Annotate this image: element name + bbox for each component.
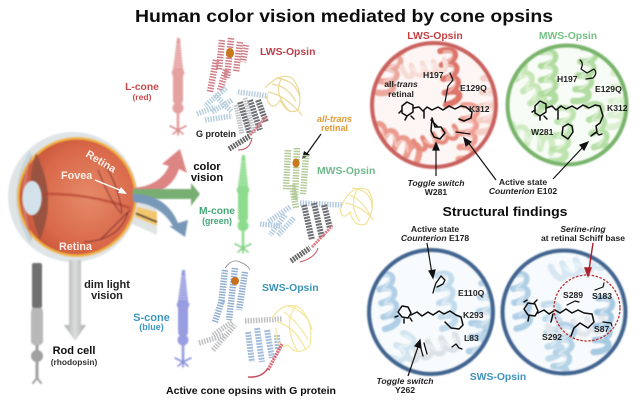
eye illustration bbox=[8, 132, 157, 262]
arrow: red to L-cone bbox=[133, 149, 187, 196]
arrow: MWS counterion bbox=[553, 142, 588, 179]
eyeball bbox=[8, 132, 138, 262]
panel: MWS-Opsin pocket bbox=[500, 40, 630, 170]
residue labels: LWS: retinal bbox=[388, 89, 414, 99]
residue labels: SWS right: S289 bbox=[563, 290, 583, 300]
L-cone label: (red) bbox=[132, 92, 152, 102]
residue labels: SWS left: E110Q bbox=[458, 288, 485, 298]
residue labels: SWS right bbox=[542, 290, 612, 342]
residue labels: MWS bbox=[531, 74, 628, 137]
callout: toggle switch Y262: Toggle switch bbox=[377, 376, 433, 386]
rod cell bbox=[31, 263, 43, 383]
residue labels: SWS left bbox=[458, 288, 485, 343]
arrow: dim light bbox=[64, 260, 86, 341]
callout: toggle switch W281: W281 bbox=[425, 187, 447, 197]
residue labels: MWS: H197 bbox=[557, 74, 578, 84]
label: SWS-Opsin: SWS-Opsin bbox=[262, 283, 319, 294]
ring: MWS bbox=[508, 46, 626, 164]
eye labels: Retina bbox=[83, 148, 119, 176]
panel: SWS-Opsin pocket right bbox=[500, 245, 630, 380]
lens bbox=[22, 181, 42, 215]
callout: counterion E102: Counterion E102 bbox=[489, 186, 557, 196]
residue labels: MWS: W281 bbox=[531, 127, 554, 137]
label: SWS-Opsin lower: SWS-Opsin bbox=[470, 372, 526, 383]
callout: toggle switch W281: Toggle switch bbox=[408, 178, 464, 188]
eye labels: Fovea bbox=[61, 170, 93, 182]
color vision label: vision bbox=[191, 172, 223, 184]
fovea arrow bbox=[95, 180, 127, 194]
M-cone bbox=[235, 155, 251, 253]
ligand: retinal bbox=[524, 283, 612, 336]
panel: SWS-Opsin pocket left bbox=[365, 245, 497, 387]
panel fill and helices bbox=[510, 48, 625, 163]
protein: LWS-Opsin with G protein bbox=[197, 38, 302, 150]
L-cone label: L-cone bbox=[125, 82, 159, 93]
residue labels: SWS right: S87 bbox=[594, 324, 610, 334]
arrows: SWS left callouts bbox=[408, 243, 435, 376]
panel: LWS-Opsin pocket bbox=[369, 40, 500, 170]
residue labels: SWS right: S183 bbox=[592, 291, 612, 301]
protein: MWS-Opsin with G protein bbox=[260, 148, 374, 262]
arrow: serine ring bbox=[585, 243, 593, 276]
dim light vision label: dim light bbox=[84, 279, 130, 291]
callout: serine-ring: Serine-ring bbox=[560, 224, 606, 234]
label: G protein: G protein bbox=[196, 129, 236, 139]
panel fill and helices bbox=[374, 46, 494, 164]
M-cone label: M-cone bbox=[199, 206, 235, 217]
arrows: LWS callouts bbox=[433, 138, 496, 180]
dim light vision label: vision bbox=[91, 290, 123, 302]
S-cone bbox=[175, 270, 191, 367]
color vision label: color bbox=[193, 161, 221, 173]
label: LWS-Opsin: LWS-Opsin bbox=[260, 47, 315, 58]
residue labels: LWS: E129Q bbox=[460, 83, 487, 93]
residue labels: LWS: H197 bbox=[423, 70, 444, 80]
residue labels: SWS left: K293 bbox=[463, 310, 484, 320]
protein: SWS-Opsin with G protein bbox=[199, 261, 312, 377]
residue labels: MWS: K312 bbox=[607, 103, 628, 113]
heading: LWS-Opsin: LWS-Opsin bbox=[407, 31, 463, 42]
callout: counterion E178: Active state bbox=[411, 224, 459, 234]
arrow: retinal pointer bbox=[302, 134, 321, 159]
caption: active cone opsins: Active cone opsins with G protein bbox=[166, 386, 336, 397]
callout: toggle switch Y262: Y262 bbox=[395, 385, 415, 395]
residue labels: LWS: all-trans bbox=[384, 79, 418, 89]
label: all-trans retinal: retinal bbox=[321, 123, 348, 133]
residue labels: SWS right: S292 bbox=[542, 332, 562, 342]
label: all-trans retinal: all-trans bbox=[317, 114, 352, 124]
optic nerve bbox=[128, 199, 157, 235]
callout: counterion E102: Active state bbox=[499, 177, 547, 187]
ligand: retinal bbox=[399, 73, 472, 139]
title: Human color vision mediated by cone opsins bbox=[135, 6, 553, 26]
label: MWS-Opsin: MWS-Opsin bbox=[317, 166, 375, 177]
L-cone bbox=[170, 38, 186, 135]
arrow: green to M-cone bbox=[133, 183, 200, 206]
ligand: retinal bbox=[532, 60, 603, 139]
S-cone label: (blue) bbox=[139, 322, 164, 332]
callout: counterion E178: Counterion E178 bbox=[401, 233, 469, 243]
heading: MWS-Opsin: MWS-Opsin bbox=[539, 31, 597, 42]
heading: structural findings: Structural findings bbox=[442, 205, 568, 219]
panel fill and helices bbox=[376, 269, 492, 366]
ring: SWS right bbox=[502, 250, 626, 374]
eye labels bbox=[59, 148, 119, 253]
residue labels: LWS: K312 bbox=[469, 104, 490, 114]
residue labels: LWS bbox=[384, 70, 490, 114]
ligand: retinal bbox=[395, 276, 463, 356]
M-cone label: (green) bbox=[202, 216, 232, 226]
S-cone label: S-cone bbox=[133, 312, 170, 324]
ring: LWS bbox=[372, 43, 496, 167]
ring: SWS left bbox=[369, 250, 493, 374]
callout: serine-ring: at retinal Schiff base bbox=[541, 233, 625, 243]
residue labels: SWS left: L83 bbox=[464, 333, 479, 343]
arrow: blue to S-cone bbox=[133, 194, 188, 237]
residue labels: MWS: E129Q bbox=[595, 84, 622, 94]
serine ring highlight bbox=[554, 275, 620, 341]
eye labels: Retina bbox=[59, 241, 93, 253]
rod cell label: Rod cell bbox=[53, 345, 95, 357]
panel fill and helices bbox=[509, 256, 617, 372]
rod cell label: (rhodopsin) bbox=[51, 357, 97, 367]
